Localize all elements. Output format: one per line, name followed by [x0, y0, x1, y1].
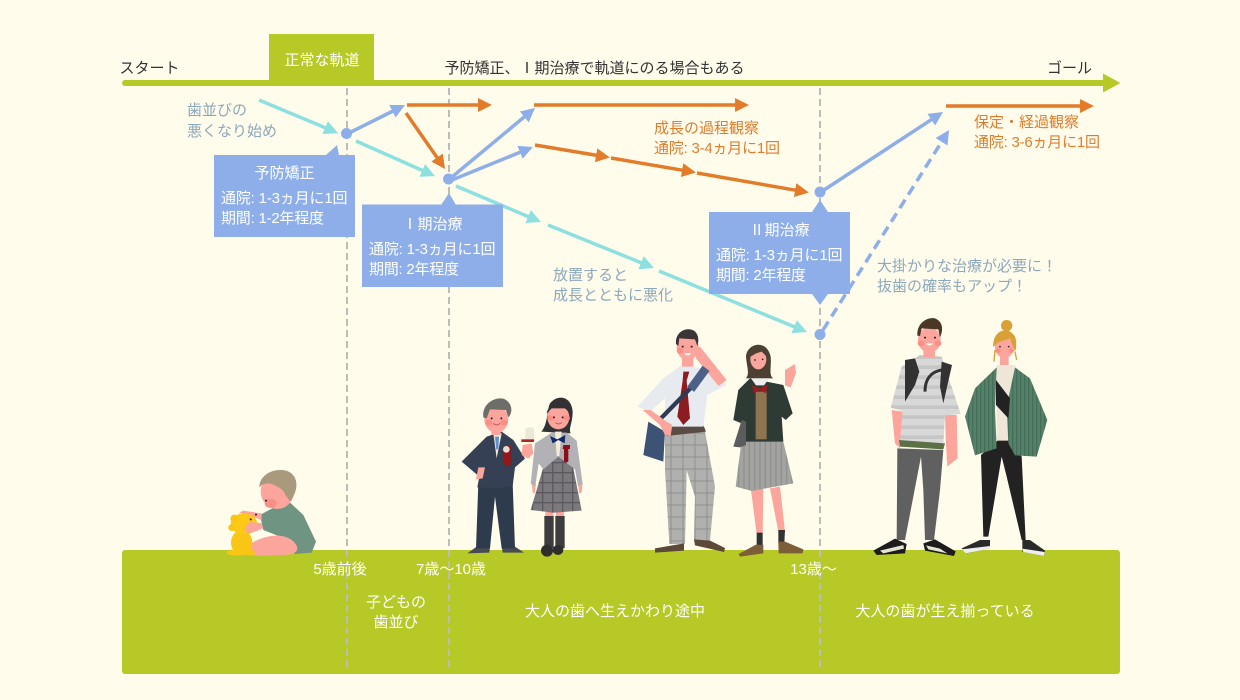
- callout: phase II treatment: [709, 200, 850, 305]
- orange arrows: observation path: [406, 105, 1084, 191]
- heading: track note: 予防矯正、Ⅰ期治療で軌道にのる場合もある: [444, 59, 745, 77]
- label: left untreated: [553, 267, 673, 304]
- stage label: child teeth: 子どもの: [366, 594, 426, 611]
- callout: preventive orthodontics: [214, 145, 355, 237]
- illustration: baby with teddy bear: [227, 470, 316, 556]
- callout: phase I treatment: Ⅰ期治療: [402, 216, 463, 233]
- cyan arrows: worsening path: [259, 100, 798, 328]
- label: goal: ゴール: [1047, 59, 1092, 77]
- blue arrows: treatment path: [351, 110, 935, 190]
- label: major treatment warning: 大掛かりな治療が必要に！: [877, 258, 1057, 275]
- label: start: スタート: [120, 60, 180, 77]
- age label: around 5: 5歳前後: [313, 561, 367, 578]
- callout: phase I treatment: 通院: 1-3ヵ月に1回: [369, 241, 496, 258]
- label: left untreated: 放置すると: [553, 267, 628, 284]
- callout: phase II treatment: 期間: 2年程度: [716, 267, 806, 284]
- label: retention observation: 保定・経過観察: [974, 114, 1079, 131]
- callout: preventive orthodontics: 通院: 1-3ヵ月に1回: [221, 190, 348, 207]
- ground band: [122, 550, 1120, 674]
- stage label: permanent dentition: 大人の歯が生え揃っている: [855, 603, 1035, 620]
- callout: phase II treatment: Ⅱ期治療: [749, 222, 810, 239]
- timeline arrow: [122, 74, 1120, 92]
- stage label: child teeth: [366, 594, 426, 631]
- tab: normal track: [269, 34, 374, 81]
- callout: phase I treatment: [362, 193, 503, 287]
- illustration: adult man with backpack: [873, 318, 961, 556]
- callout: phase II treatment: 通院: 1-3ヵ月に1回: [716, 247, 842, 264]
- age label: 13 and up: 13歳〜: [790, 561, 837, 578]
- label: retention observation: [974, 114, 1100, 151]
- stage label: child teeth: 歯並び: [373, 614, 419, 631]
- callout: preventive orthodontics: 予防矯正: [254, 164, 315, 182]
- milestone dots: [341, 128, 826, 340]
- age marker dashed lines: [347, 88, 820, 668]
- illustration: elementary boy in suit: [462, 398, 534, 553]
- stage label: mixed dentition: 大人の歯へ生えかわり途中: [525, 603, 705, 620]
- label: major treatment warning: [877, 258, 1057, 295]
- illustration: adult woman in green jacket: [962, 320, 1047, 556]
- illustration: elementary girl: [531, 398, 583, 557]
- label: misalignment begins: 悪くなり始め: [187, 123, 277, 140]
- illustration: junior high boy with bag: [637, 329, 727, 553]
- label: growth observation: 通院: 3-4ヵ月に1回: [654, 140, 780, 157]
- label: misalignment begins: [187, 102, 277, 140]
- dashed arrow: major treatment: [823, 138, 944, 330]
- callout: preventive orthodontics: 期間: 1-2年程度: [221, 210, 324, 227]
- label: growth observation: [654, 120, 780, 157]
- label: major treatment warning: 抜歯の確率もアップ！: [877, 278, 1027, 295]
- illustration: junior high girl waving: [733, 345, 803, 557]
- label: misalignment begins: 歯並びの: [187, 102, 247, 119]
- callout: phase I treatment: 期間: 2年程度: [369, 261, 459, 278]
- label: left untreated: 成長とともに悪化: [553, 287, 673, 304]
- tab: normal track: 正常な軌道: [284, 52, 360, 69]
- age label: 7 to 10: 7歳〜10歳: [416, 561, 486, 578]
- label: retention observation: 通院: 3-6ヵ月に1回: [974, 134, 1100, 151]
- label: growth observation: 成長の過程観察: [654, 120, 759, 137]
